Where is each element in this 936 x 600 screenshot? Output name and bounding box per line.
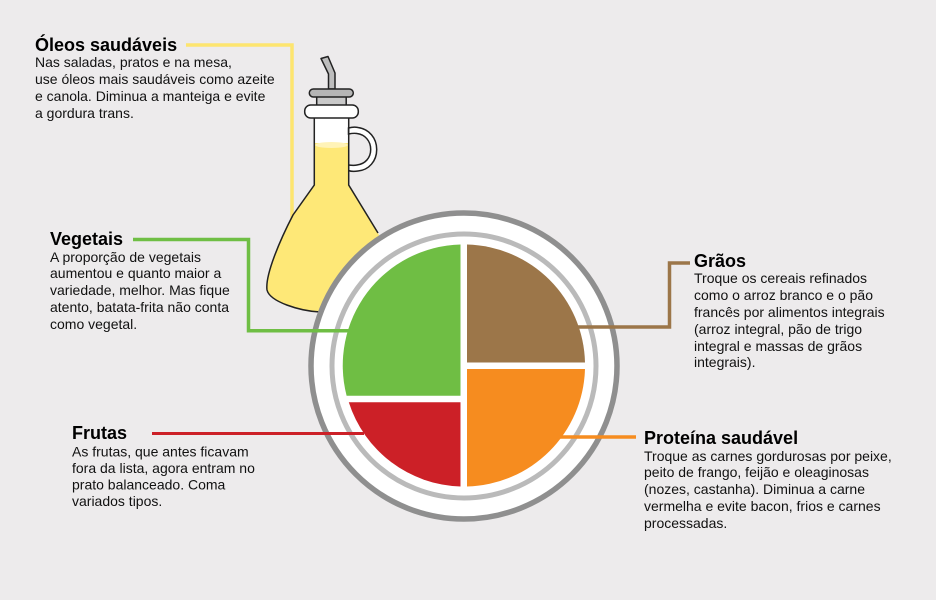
body: fruits: variados tipos. — [72, 493, 162, 509]
bottle stopper — [317, 96, 346, 106]
plate outer rim — [311, 213, 617, 519]
heading: vegetables: Vegetais — [50, 229, 123, 249]
quadrant: protein — [467, 369, 585, 486]
text block: oils — [35, 34, 275, 121]
body: protein: processadas. — [644, 515, 727, 531]
body: grains: (arroz integral, pão de trigo — [694, 321, 862, 337]
body: oils: Nas saladas, pratos e na mesa, — [35, 54, 232, 70]
bottle collar — [305, 105, 358, 118]
bottle handle — [348, 127, 377, 171]
heading: fruits: Frutas — [72, 423, 127, 443]
quadrant: grains — [467, 244, 585, 362]
plate inner ring — [332, 234, 596, 498]
body: fruits: fora da lista, agora entram no — [72, 460, 255, 476]
quadrant: fruits — [349, 402, 460, 486]
body: protein: vermelha e evite bacon, frios e carnes — [644, 498, 881, 514]
bottle cap — [309, 89, 353, 97]
body: vegetables: A proporção de vegetais — [50, 249, 201, 265]
body: fruits: As frutas, que antes ficavam — [72, 444, 249, 460]
bottle oil body — [267, 143, 390, 312]
body: protein: (nozes, castanha). Diminua a carne — [644, 481, 865, 497]
body: grains: francês por alimentos integrais — [694, 304, 885, 320]
body: protein: Troque as carnes gordurosas por peixe, — [644, 448, 892, 464]
heading: oils: Óleos saudáveis — [35, 34, 177, 55]
body: vegetables: variedade, melhor. Mas fique — [50, 282, 230, 298]
body: grains: como o arroz branco e o pão — [694, 287, 873, 303]
connector: protein — [559, 435, 636, 439]
bottle glass neck — [314, 117, 348, 147]
plate — [311, 213, 617, 519]
body: vegetables: atento, batata-frita não conta — [50, 299, 229, 315]
body: fruits: prato balanceado. Coma — [72, 476, 226, 492]
text block: grains — [694, 251, 885, 370]
body: grains: integral e massas de grãos — [694, 338, 862, 354]
quadrant: vegetables — [343, 244, 460, 396]
body: grains: integrais). — [694, 354, 755, 370]
bottle spout — [321, 56, 335, 89]
body: oils: e canola. Diminua a manteiga e evite — [35, 88, 266, 104]
body: grains: Troque os cereais refinados — [694, 270, 867, 286]
bottle outline — [267, 117, 378, 312]
heading: protein: Proteína saudável — [644, 428, 798, 448]
body: protein: peito de frango, feijão e oleaginosas — [644, 464, 869, 480]
connector: vegetables — [133, 240, 349, 331]
connector: oils — [186, 45, 292, 222]
text block: vegetables — [50, 229, 230, 332]
icon: oil bottle — [267, 56, 390, 312]
body: vegetables: como vegetal. — [50, 316, 137, 332]
heading: grains: Grãos — [694, 251, 746, 271]
connector: grains — [578, 263, 690, 327]
body: vegetables: aumentou e quanto maior a — [50, 265, 221, 281]
text block: fruits — [72, 423, 255, 509]
text block: protein — [644, 428, 892, 531]
oil surface highlight — [315, 142, 348, 148]
connector: fruits — [152, 432, 364, 435]
body: oils: use óleos mais saudáveis como azeite — [35, 71, 275, 87]
body: oils: a gordura trans. — [35, 105, 134, 121]
